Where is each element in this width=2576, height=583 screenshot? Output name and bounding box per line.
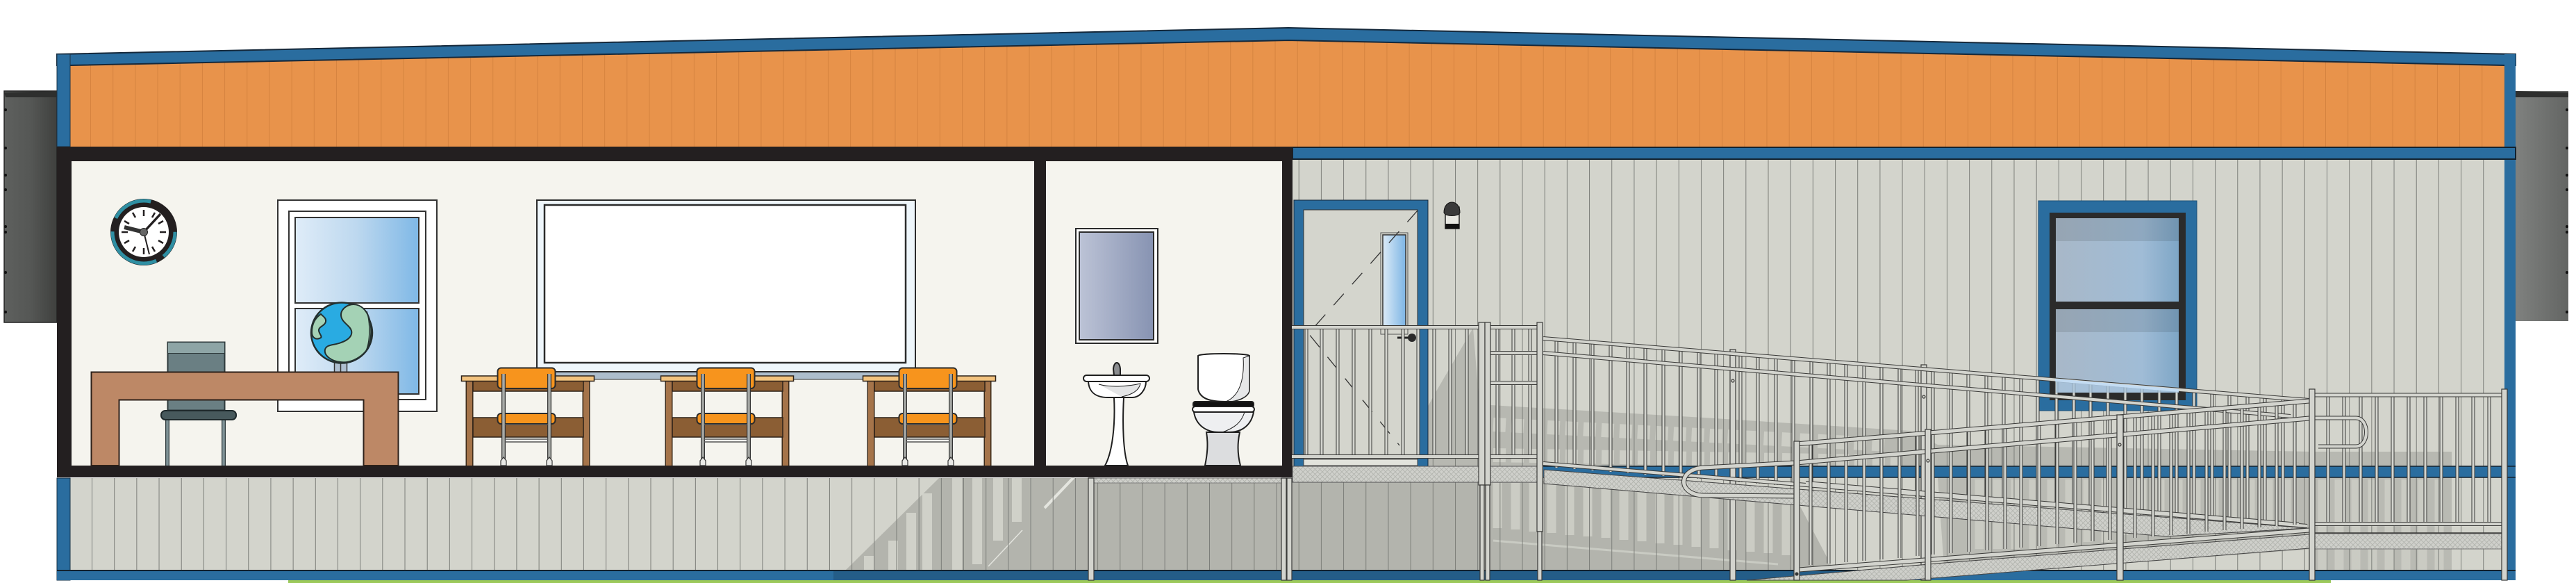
- toilet: [1193, 354, 1254, 466]
- green ground strip: [288, 580, 2331, 583]
- entry landing: [1094, 327, 1539, 483]
- landing support posts: [1088, 322, 1927, 580]
- door: [1294, 200, 1428, 466]
- student desk and chair 1: [461, 368, 595, 466]
- restroom mirror: [1076, 229, 1158, 343]
- lower ramp run: [1684, 401, 2309, 580]
- classroom window: [278, 200, 437, 411]
- exterior window: [2038, 201, 2197, 411]
- classroom interior: [72, 161, 1034, 466]
- pedestal sink: [1083, 363, 1149, 466]
- globe: [311, 303, 372, 374]
- student desk and chair 2: [661, 368, 793, 466]
- wall light fixture: [1444, 202, 1460, 229]
- exterior siding wall base colour: [70, 159, 2504, 570]
- window glass over the upper ramp rail: [2055, 379, 2179, 393]
- upper landing with railing: [2309, 389, 2507, 580]
- blue roof fascia: [57, 28, 2516, 65]
- whiteboard: [537, 200, 915, 379]
- shadow of ramp below the landing: [846, 477, 1834, 570]
- left air conditioning unit: [4, 91, 57, 322]
- black section walls: [57, 147, 1293, 477]
- siding panel seams: [70, 159, 2504, 570]
- shadow of ramp railing on wall: [1411, 328, 2452, 577]
- upper ramp run: [1543, 338, 2309, 536]
- lower ramp posts and bolts: [1731, 379, 2123, 580]
- orange roof soffit panel: [70, 40, 2504, 147]
- restroom interior: [1046, 161, 1282, 466]
- teacher desk: [92, 372, 399, 466]
- wall clock: [110, 199, 177, 265]
- student desk and chair 3: [863, 368, 996, 466]
- teacher chair: [161, 342, 236, 466]
- right air conditioning unit: [2516, 91, 2568, 321]
